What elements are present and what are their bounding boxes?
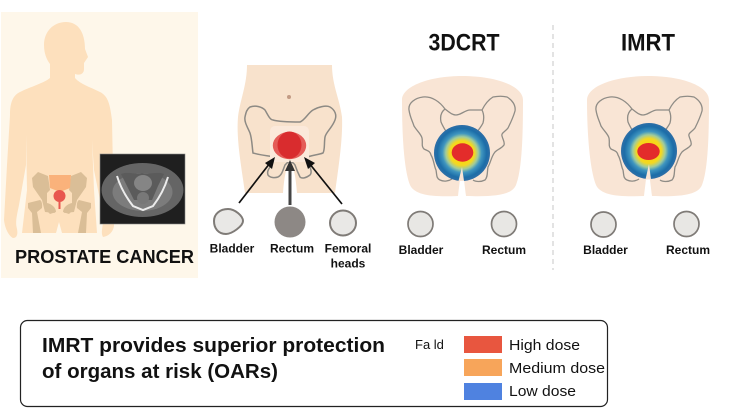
lower torso [238,65,342,193]
navel [287,95,291,99]
callout text: IMRT provides superior protection [42,335,385,357]
icon: rectum [674,212,699,236]
dose distribution [434,125,490,181]
pelvis outline [409,96,515,182]
label: femoral heads: Femoral [325,242,371,256]
heading: IMRT: IMRT [621,30,675,56]
label: rectum: Rectum [482,243,526,257]
icon: prostate tumour [54,190,66,209]
legend title: Fa ld [415,337,444,352]
icon: bladder [49,175,71,192]
icon: bladder [408,212,433,236]
tumour target [270,126,309,162]
label: bladder: Bladder [399,243,444,257]
panel: IMRT [583,30,710,257]
arrow to tumour from bladder [239,157,275,203]
callout and legend box [20,320,608,406]
legend: low dose [464,383,576,400]
label: rectum: Rectum [666,243,710,257]
panel: prostate cancer [1,12,198,278]
panel: 3DCRT [399,30,526,257]
arrow to tumour from femoral heads [304,157,342,204]
CT scan image [100,154,185,224]
legend: high dose: High dose [509,337,580,354]
icon: pelvis bones [28,172,91,233]
label: bladder: Bladder [583,243,628,257]
label: bladder: Bladder [210,242,255,256]
legend: high dose [464,336,580,354]
icon: rectum [492,212,516,236]
icon: femoral head [330,210,356,236]
icon: bladder [214,209,243,234]
icon: rectum [274,206,306,238]
panel: anatomy and organs at risk [210,65,371,270]
label: rectum: Rectum [270,242,314,256]
dose distribution [621,123,677,180]
legend: medium dose: Medium dose [509,360,605,377]
callout text [42,335,385,383]
label: femoral heads: heads [331,256,366,270]
heading: 3DCRT: 3DCRT [428,30,500,56]
pelvis region body [402,76,523,196]
callout text: of organs at risk (OARs) [42,361,278,383]
arrow to tumour from rectum [285,160,295,205]
label: prostate cancer: PROSTATE CANCER [15,247,194,267]
legend: medium dose [464,359,605,377]
human body silhouette [4,22,114,238]
pelvis region body [587,76,709,196]
icon: bladder [591,212,616,237]
column divider [552,25,554,270]
legend: low dose: Low dose [509,383,576,400]
pelvis outline [245,106,336,178]
pelvis outline [596,96,702,182]
